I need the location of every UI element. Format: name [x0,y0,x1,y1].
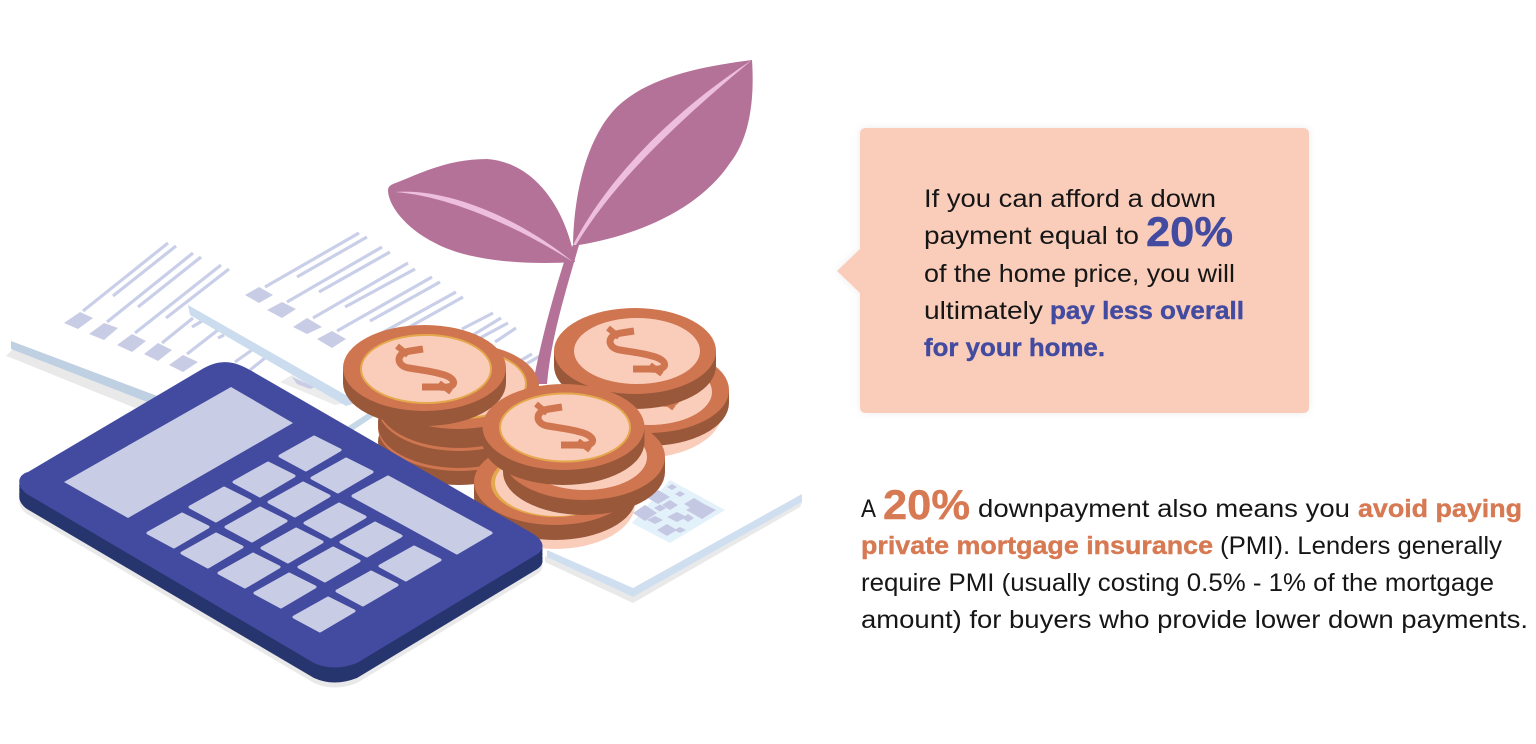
callout panel [837,128,1309,413]
coin stack: front [474,384,665,549]
PMI paragraph: (PMI). Lenders generally [1220,532,1503,560]
PMI paragraph [861,481,1528,634]
callout text: payment equal to [924,222,1139,250]
callout text: ultimately [924,297,1044,325]
paper: left sheet [6,243,265,408]
PMI paragraph: private mortgage insurance [861,532,1213,560]
coin stack: back right [554,308,729,458]
paper: middle sheet [188,233,540,431]
PMI paragraph: downpayment also means you [978,495,1350,523]
paper: right sheet with code [545,480,802,603]
icon: calculator [19,362,543,688]
PMI paragraph: A [861,495,876,523]
sprout stem [533,245,579,384]
sprout left leaf vein [395,192,573,262]
PMI paragraph: amount) for buyers who provide lower down payments. [861,606,1528,634]
calculator shadow [19,382,543,688]
callout background [837,128,1309,413]
PMI paragraph: 20% [883,481,970,528]
callout text [924,185,1244,362]
callout text: of the home price, you will [924,260,1235,288]
sprout left leaf [388,159,575,263]
callout text: If you can afford a down [924,185,1216,213]
calculator wide key [353,477,491,553]
calculator screen [64,387,293,518]
calculator side [19,366,543,682]
sprout right leaf vein [573,60,752,245]
coin stack: left [343,325,540,485]
icon: sprout [388,60,753,384]
calculator keys [148,437,440,631]
callout text: 20% [1146,208,1233,255]
calculator body [19,362,543,668]
callout text: for your home. [924,334,1105,362]
PMI paragraph: avoid paying [1358,495,1522,523]
callout text: pay less overall [1050,297,1244,325]
sprout right leaf [573,60,753,245]
PMI paragraph: require PMI (usually costing 0.5% - 1% of the mortgage [861,569,1494,597]
illustration: papers, sprout, coins and calculator [6,60,802,688]
